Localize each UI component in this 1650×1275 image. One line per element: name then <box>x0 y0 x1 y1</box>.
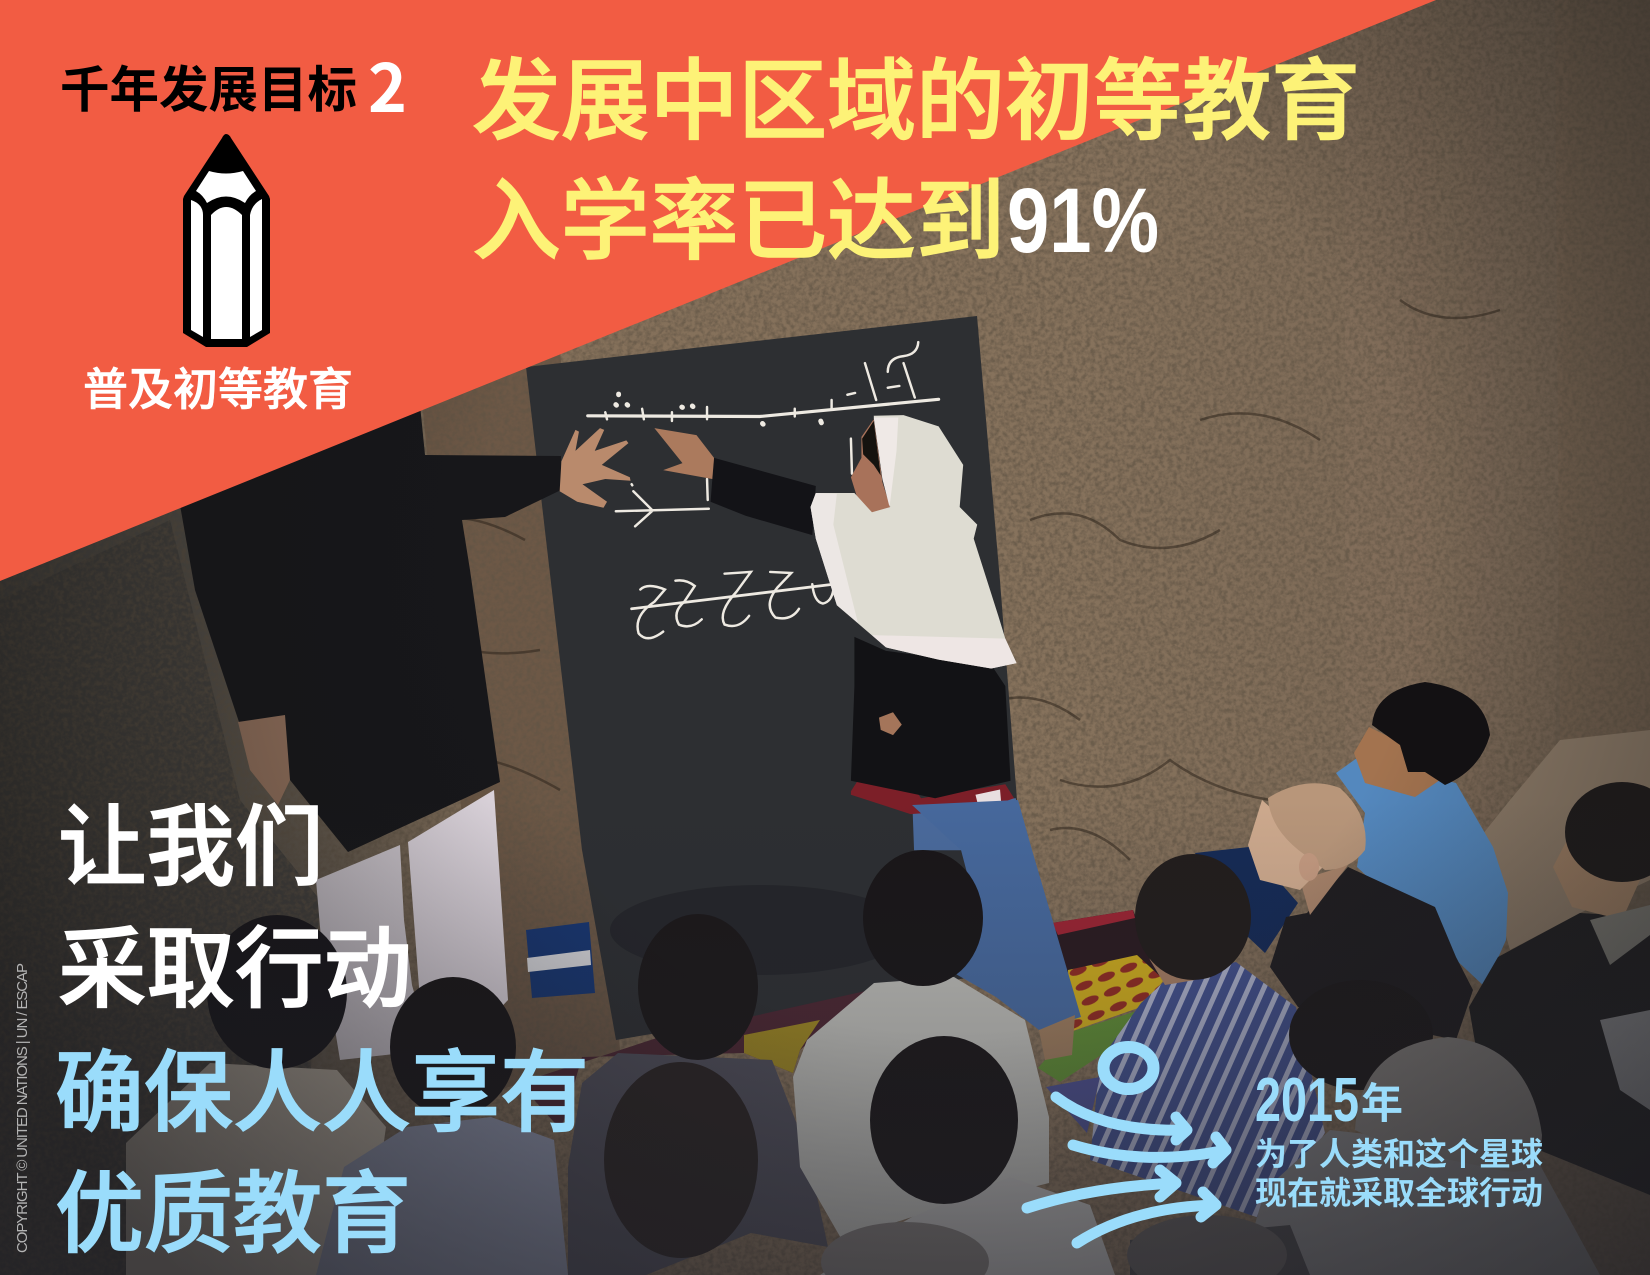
2015 call to action: 2015 <box>1255 1066 1359 1135</box>
box of chalk <box>526 922 595 998</box>
girl's jeans and foot <box>912 800 1081 1060</box>
man in black jacket and white trousers <box>180 405 631 1060</box>
icon: 2015 target logo with arrows <box>1027 1047 1226 1243</box>
red triangle banner <box>0 0 1436 581</box>
call to action: 优质教育 <box>55 1142 411 1271</box>
girl in white headscarf at the board <box>654 415 1026 850</box>
boy in checked shirt <box>1046 854 1325 1220</box>
rugs on the ground <box>519 910 1164 1130</box>
goal heading: 2 <box>368 36 407 132</box>
call to action: 采取行动 <box>58 898 412 1026</box>
boy at far right in dark coat <box>1469 782 1650 1195</box>
blue case behind the boys <box>1195 847 1298 953</box>
dusty ground on the right <box>1470 730 1650 950</box>
goal name: 普及初等教育 <box>83 353 353 418</box>
2015 call to action: 现在就采取全球行动 <box>1255 1168 1543 1214</box>
main headline: 91% <box>1007 170 1159 272</box>
2015 call to action: 年 <box>1361 1070 1403 1131</box>
goal heading <box>60 36 407 132</box>
goal heading: 千年发展目标 <box>60 51 357 122</box>
call to action: 确保人人享有 <box>55 1021 589 1150</box>
blackboard <box>526 316 1060 1040</box>
seated boy in blue shirt <box>1336 682 1508 987</box>
2015 call to action <box>1255 1066 1543 1214</box>
bald boy in dark top <box>1248 783 1473 1040</box>
front row of seated boys seen from behind <box>126 850 1600 1275</box>
chalk writing on the board <box>588 342 939 638</box>
copyright: COPYRIGHT © UNITED NATIONS | UN / ESCAP <box>14 963 31 1253</box>
call to action: 让我们 <box>58 776 324 904</box>
main headline: 入学率已达到 <box>472 149 1005 278</box>
main headline <box>472 29 1360 278</box>
call to action <box>55 776 589 1271</box>
icon: pencil <box>183 134 270 347</box>
main headline: 发展中区域的初等教育 <box>472 29 1360 158</box>
2015 call to action: 为了人类和这个星球 <box>1255 1129 1543 1175</box>
